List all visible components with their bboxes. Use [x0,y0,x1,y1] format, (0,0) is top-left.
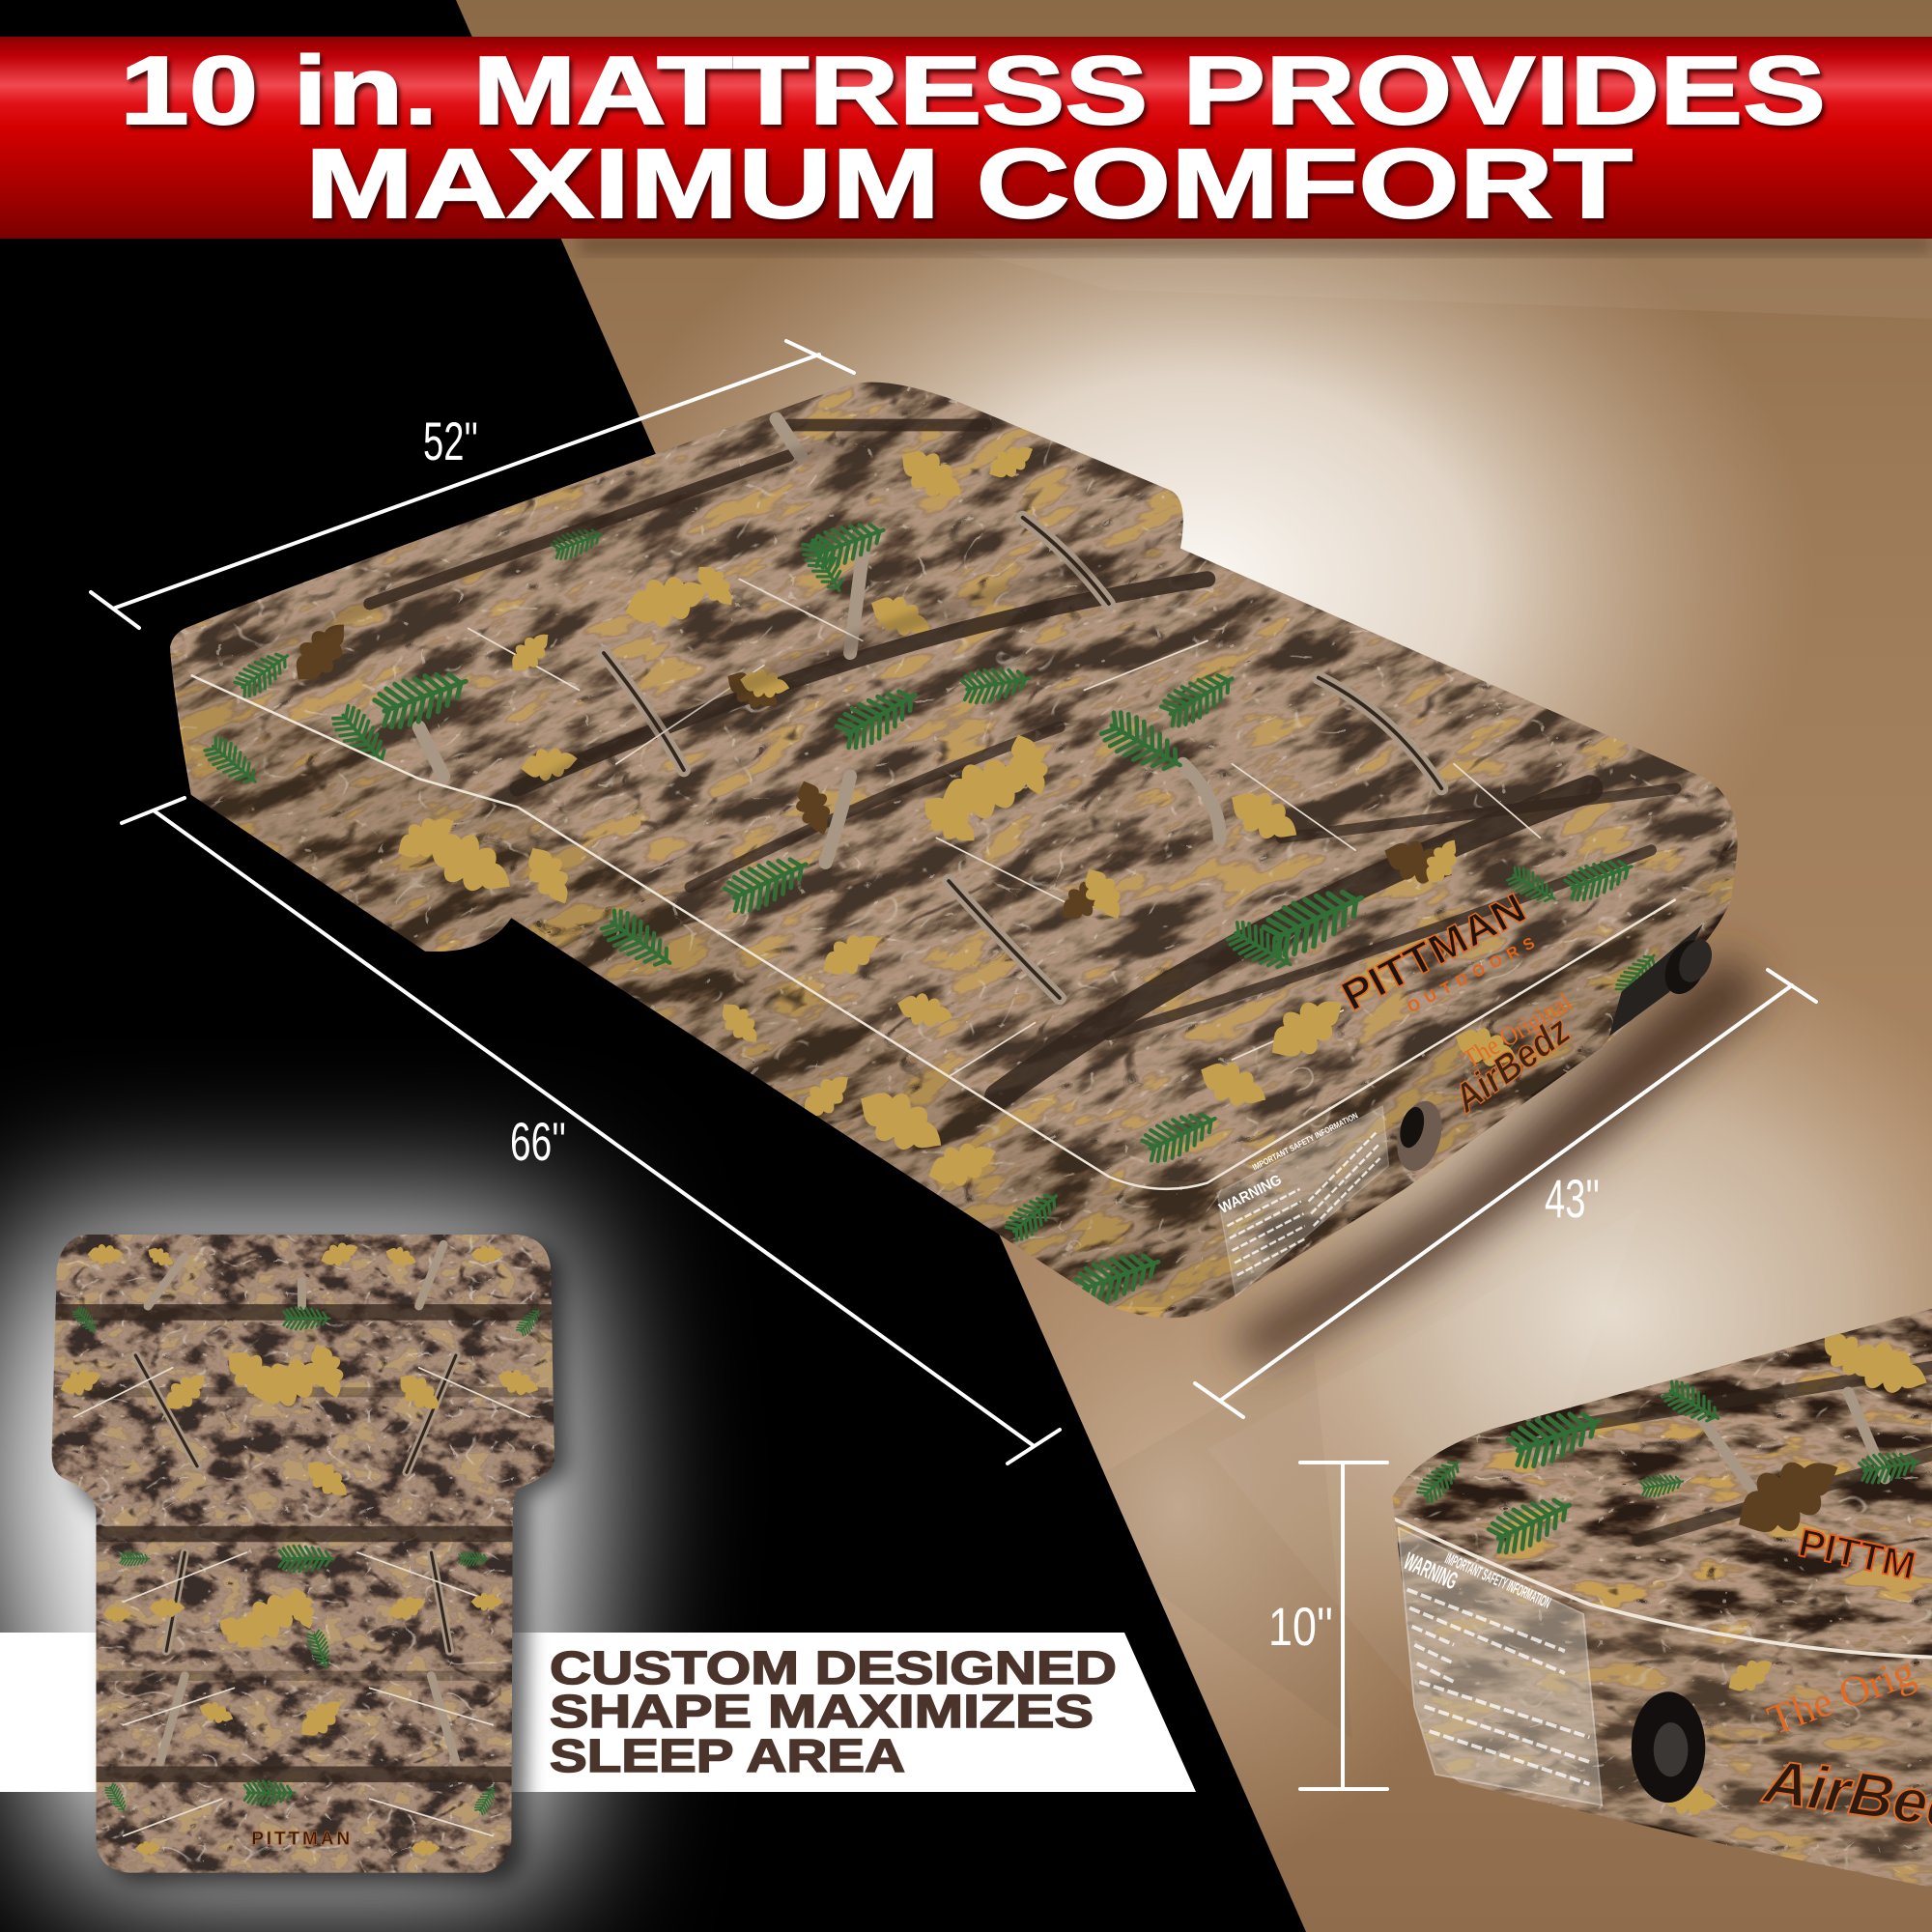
inflation valve [1390,1096,1449,1176]
white glow behind flat mattress [0,1220,591,1886]
pump panel and knob [1609,924,1719,1037]
label: 66 inches: 66'' [510,1111,566,1172]
warning label on mattress side [1216,1106,1388,1296]
dimension: 10 inch height line [1268,1463,1387,1789]
pillow ridges [215,425,1158,801]
main camo mattress, angled view [170,383,1738,1318]
dimension: 66 inch length line [122,798,1060,1463]
close-up safety label [1399,1528,1602,1805]
seam highlight [191,675,1676,1189]
gold leaves [727,672,777,707]
brand: The Original AirBedz: The Original [1458,987,1577,1075]
bark and branches [998,788,1589,1096]
close-up brand text [1758,1520,1932,1843]
close-up safety label: IMPORTANT SAFETY INFORMATION [1442,1549,1553,1612]
caption text: SHAPE MAXIMIZES [550,1687,1094,1738]
side face leaves [433,835,510,891]
warning label on mattress side: WARNING [1216,1172,1285,1217]
front side panel [1392,1521,1932,1888]
title text [120,37,1826,239]
caption banner [0,1633,1196,1792]
green needles [372,672,469,730]
title text: 10 in. MATTRESS PROVIDES [120,37,1826,145]
warning label on mattress side: IMPORTANT SAFETY INFORMATION [1251,1111,1359,1173]
side faces tint [170,647,1737,1309]
label: 10 inches: 10'' [1268,1596,1333,1657]
label: 52 inches: 52'' [423,411,478,471]
tan gradient background panel [456,0,1932,1932]
dimension: 52 inch width line [91,341,854,628]
close-up mattress corner, height detail [1386,1300,1932,1891]
band shadow [580,236,1932,253]
close-up brand text: The Orig [1762,1648,1920,1744]
flat mattress top view [37,1220,567,1886]
small brand text: PITTMAN [251,1829,350,1849]
close-up brand text: PITTM [1795,1520,1919,1588]
mattress shadow on floor [1227,952,1768,1362]
brand: Pittman Outdoors: PITTMAN [1334,885,1534,1020]
brand: Pittman Outdoors: OUTDOORS [1404,933,1538,1016]
close-up valve [1632,1691,1705,1803]
dimension: 43 inch width line [1195,970,1816,1417]
close-up safety label: WARNING [1400,1548,1462,1595]
brand: The Original AirBedz: AirBedz [1444,1008,1578,1122]
title text: MAXIMUM COMFORT [305,128,1633,239]
caption text: CUSTOM DESIGNED [550,1643,1117,1694]
caption text [550,1643,1117,1782]
label: 43 inches: 43'' [1545,1168,1600,1229]
title banner [0,37,1932,239]
caption text: SLEEP AREA [550,1731,905,1782]
